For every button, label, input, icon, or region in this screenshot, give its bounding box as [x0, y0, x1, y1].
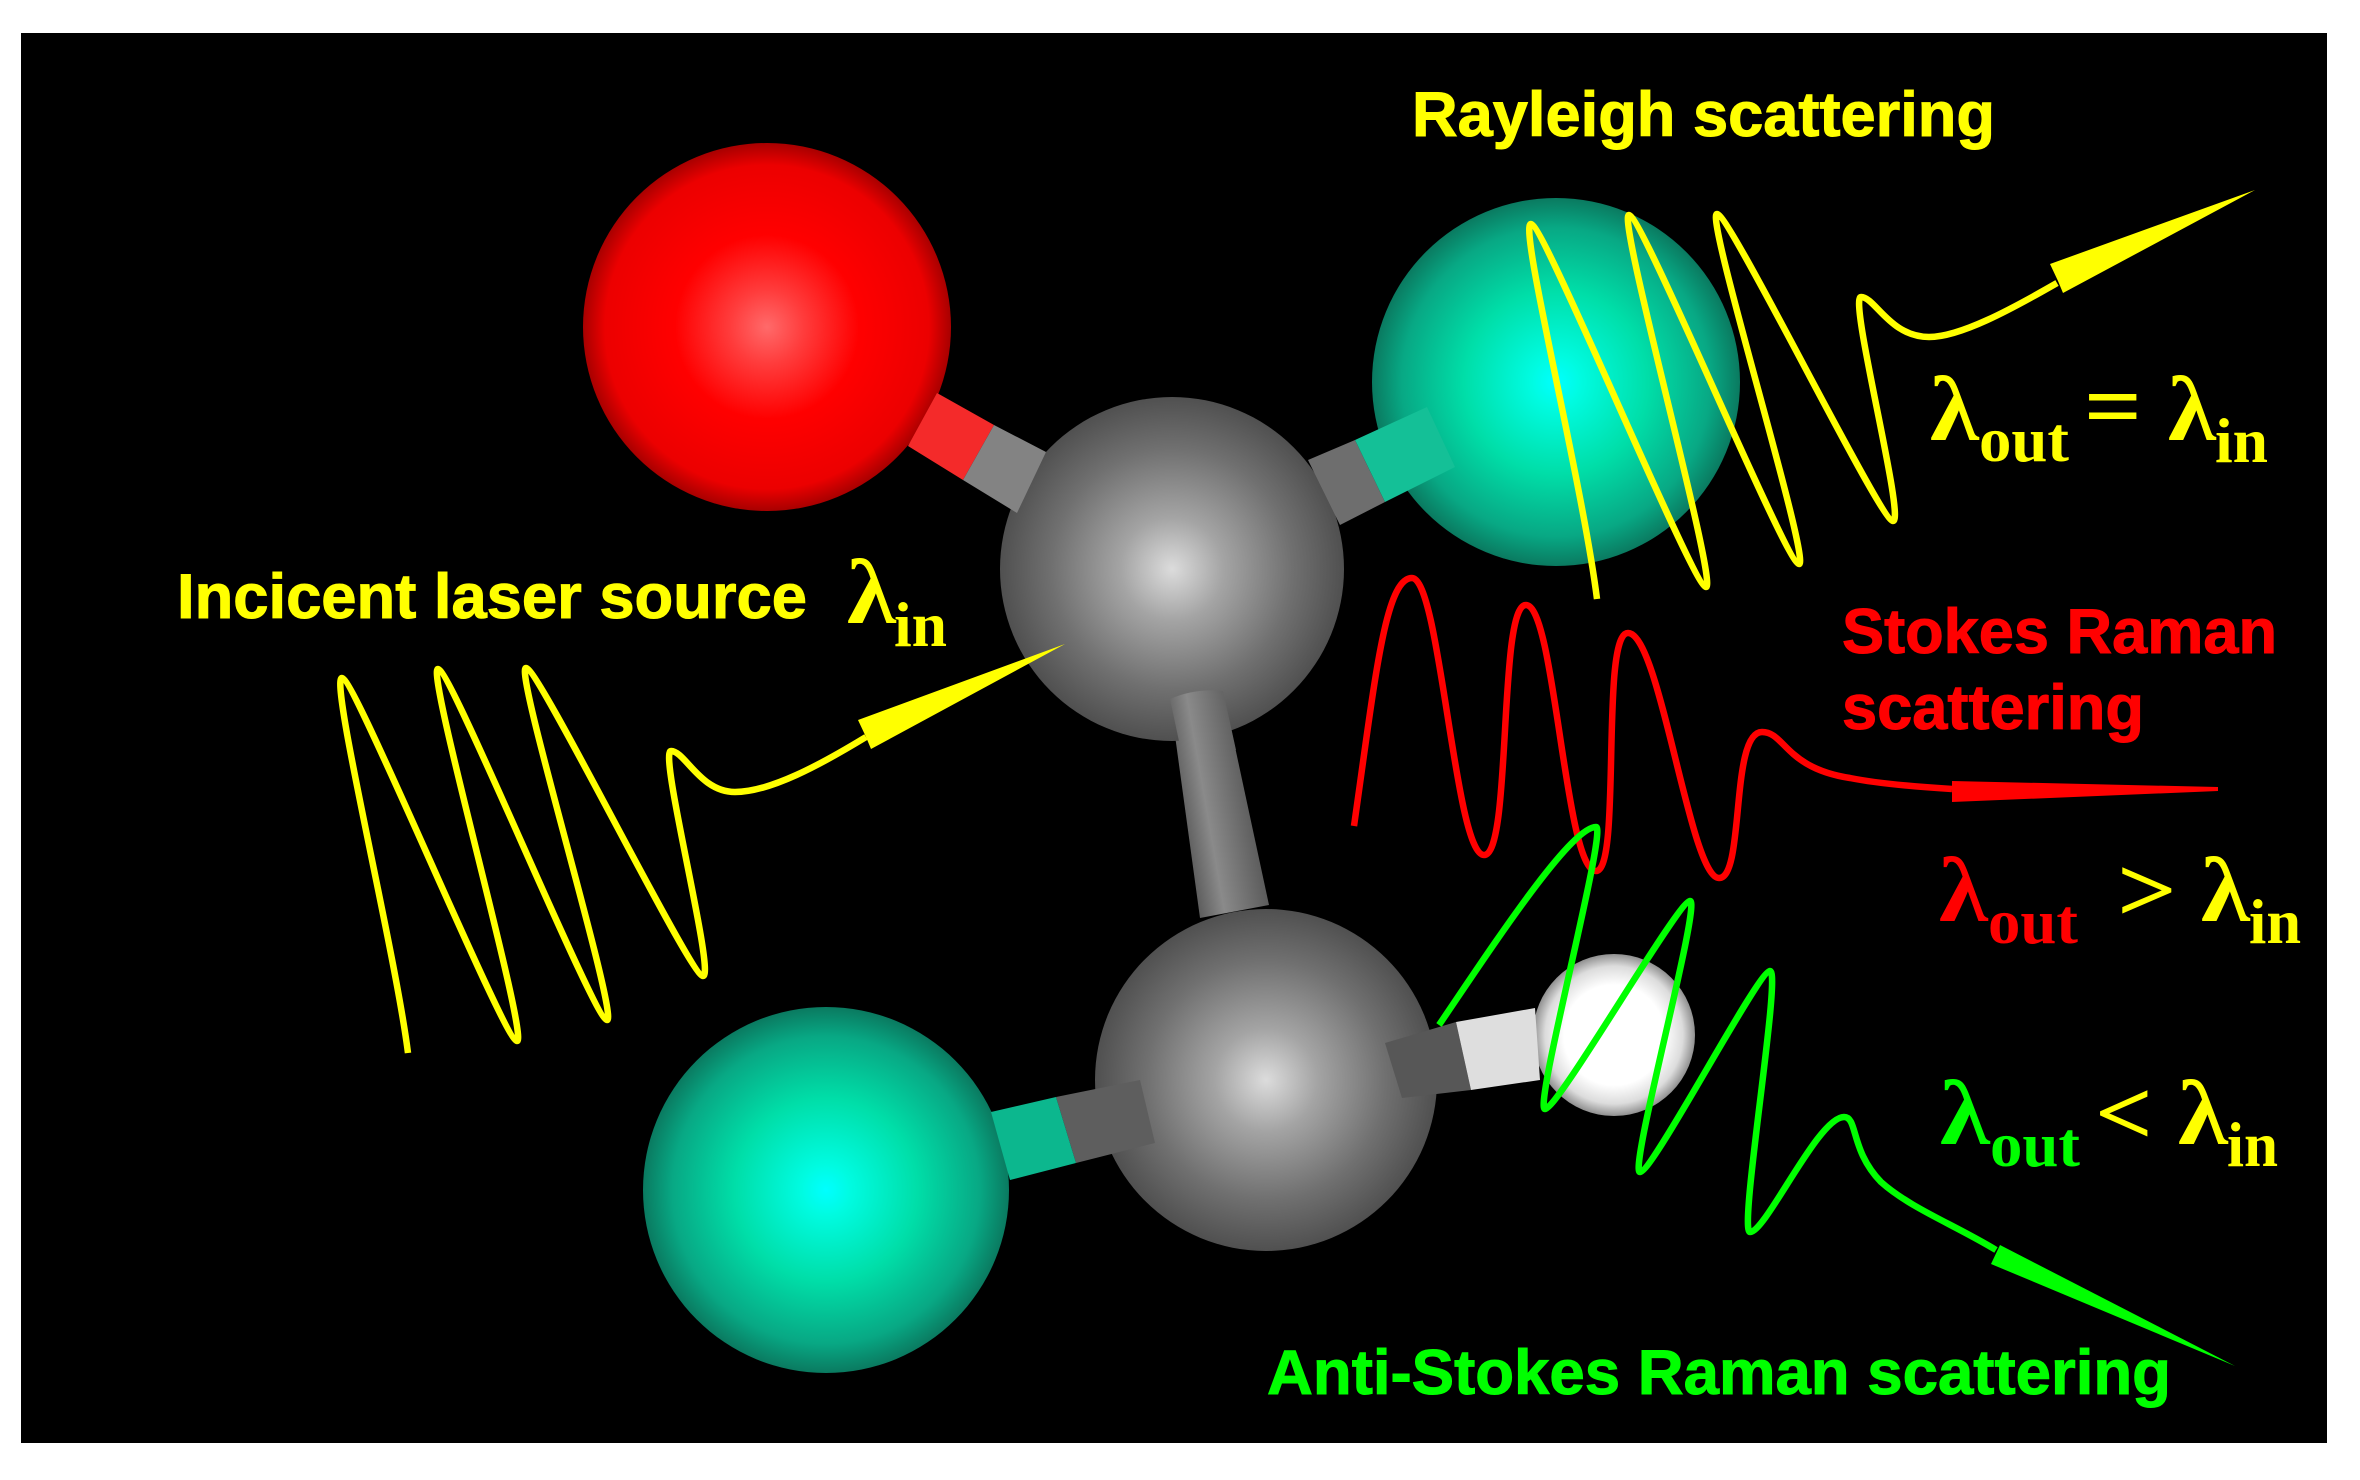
heading: incident laser source [177, 541, 947, 660]
equation: lambda out greater than lambda in: λ [2201, 839, 2251, 941]
equation: lambda out greater than lambda in: > [2117, 839, 2177, 941]
heading: Stokes Raman scattering [1842, 597, 2277, 743]
equation: lambda out equals lambda in: = [2084, 355, 2142, 457]
bond: lower carbon to hydrogen [1385, 1008, 1540, 1098]
equation: lambda out greater than lambda in [1939, 839, 2301, 957]
atom: lower halogen teal sphere [643, 1007, 1009, 1373]
equation: lambda out equals lambda in: out [1979, 404, 2070, 475]
heading: Stokes Raman scattering: scattering [1842, 673, 2144, 743]
atom: upper carbon grey sphere [1000, 397, 1344, 741]
heading: incident laser source: in [894, 589, 947, 660]
atom: oxygen red sphere [583, 143, 951, 511]
heading: Rayleigh scattering: Rayleigh scattering [1412, 80, 1995, 150]
equation: lambda out greater than lambda in: λ [1939, 839, 1989, 941]
equation: lambda out equals lambda in [1930, 355, 2268, 476]
anti-Stokes Raman scattered wave arrow [1439, 827, 2235, 1366]
heading: incident laser source: λ [847, 541, 897, 643]
atom: upper halogen teal sphere [1372, 198, 1740, 566]
atom: hydrogen white sphere [1533, 954, 1695, 1116]
incident laser wave arrow [340, 644, 1065, 1053]
bond: lower carbon to teal atom [991, 1080, 1155, 1180]
equation: lambda out equals lambda in: λ [1930, 358, 1980, 460]
equation: lambda out less than lambda in: λ [1940, 1062, 1991, 1164]
bond: oxygen to carbon [908, 393, 1046, 513]
equation: lambda out less than lambda in: < [2095, 1062, 2153, 1164]
equation: lambda out equals lambda in: in [2215, 405, 2268, 476]
equation: lambda out less than lambda in [1940, 1062, 2278, 1180]
Stokes Raman scattered wave arrow [1354, 578, 2218, 878]
bond: carbon to carbon [1170, 690, 1269, 918]
bond: carbon to carbon upper end [1170, 690, 1236, 760]
equation: lambda out equals lambda in: λ [2168, 358, 2217, 460]
heading: Stokes Raman scattering: Stokes Raman [1842, 597, 2277, 667]
equation: lambda out less than lambda in: out [1990, 1109, 2081, 1180]
molecule model [583, 143, 1740, 1373]
bond: upper carbon to teal atom [1308, 407, 1455, 525]
heading: Anti-Stokes Raman scattering: Anti-Stokes Raman scattering [1267, 1338, 2171, 1408]
equation: lambda out less than lambda in: in [2227, 1109, 2278, 1180]
equation: lambda out less than lambda in: λ [2178, 1062, 2229, 1164]
equation: lambda out greater than lambda in: out [1988, 886, 2079, 957]
atom: lower carbon grey sphere [1095, 909, 1437, 1251]
heading: incident laser source: Incicent laser source [177, 562, 807, 632]
equation: lambda out greater than lambda in: in [2249, 886, 2301, 957]
Rayleigh scattered wave arrow [1529, 190, 2255, 599]
